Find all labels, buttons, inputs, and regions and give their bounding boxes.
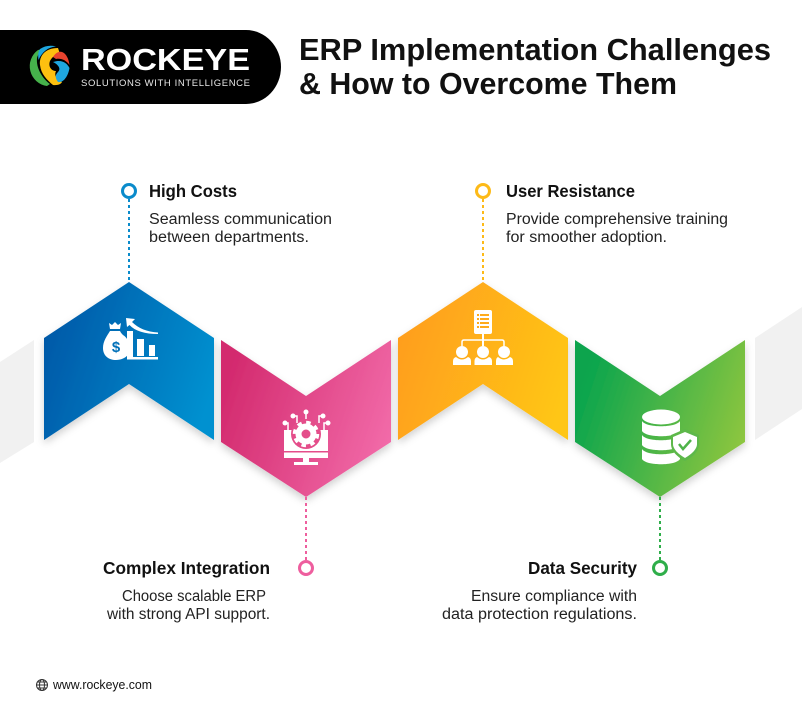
chevron: blue xyxy=(44,282,214,440)
text block: complex integration: with strong API support. xyxy=(106,606,270,623)
footer website: www.rockeye.com xyxy=(52,677,152,692)
text block: user resistance: Provide comprehensive training xyxy=(506,211,728,228)
icon: document and team hierarchy xyxy=(453,310,513,365)
decorative grey chevron left xyxy=(0,340,34,463)
logo swirl icon xyxy=(30,46,70,86)
decorative grey chevron right xyxy=(755,307,802,440)
connector: data security xyxy=(654,497,666,574)
title: ERP Implementation Challenges xyxy=(299,32,771,67)
text block: high costs: Seamless communication xyxy=(149,211,332,228)
text block: user resistance xyxy=(506,181,728,246)
icon: globe xyxy=(36,680,48,690)
chevron: orange xyxy=(398,282,568,440)
header logo pill xyxy=(0,30,281,104)
text block: user resistance: for smoother adoption. xyxy=(506,229,667,246)
text block: high costs: High Costs xyxy=(149,181,237,201)
text block: high costs xyxy=(149,181,332,246)
logo wordmark: ROCKEYE xyxy=(81,42,250,77)
icon: money bag and falling cost chart xyxy=(103,318,158,360)
connector: complex integration xyxy=(300,497,312,574)
logo tagline: SOLUTIONS WITH INTELLIGENCE xyxy=(81,78,250,89)
icon: database with shield xyxy=(642,410,699,464)
text block: data security: Data Security xyxy=(528,558,637,578)
icon: monitor with gear and circuits xyxy=(282,410,330,465)
text block: complex integration: Choose scalable ERP xyxy=(122,588,266,605)
connector: high costs xyxy=(122,184,136,282)
text block: complex integration xyxy=(103,558,270,623)
text block: complex integration: Complex Integration xyxy=(103,558,270,578)
title: & How to Overcome Them xyxy=(299,66,677,101)
text block: data security: Ensure compliance with xyxy=(471,588,637,605)
title xyxy=(299,32,771,101)
text block: user resistance: User Resistance xyxy=(506,181,635,201)
text block: data security: data protection regulations. xyxy=(442,606,637,623)
icon: money bag and falling cost chart: $ xyxy=(112,339,121,356)
text block: high costs: between departments. xyxy=(149,229,309,246)
connector: user resistance xyxy=(476,184,490,282)
text block: data security xyxy=(442,558,637,623)
chevron: pink xyxy=(221,340,391,497)
chevron: green xyxy=(575,340,745,497)
